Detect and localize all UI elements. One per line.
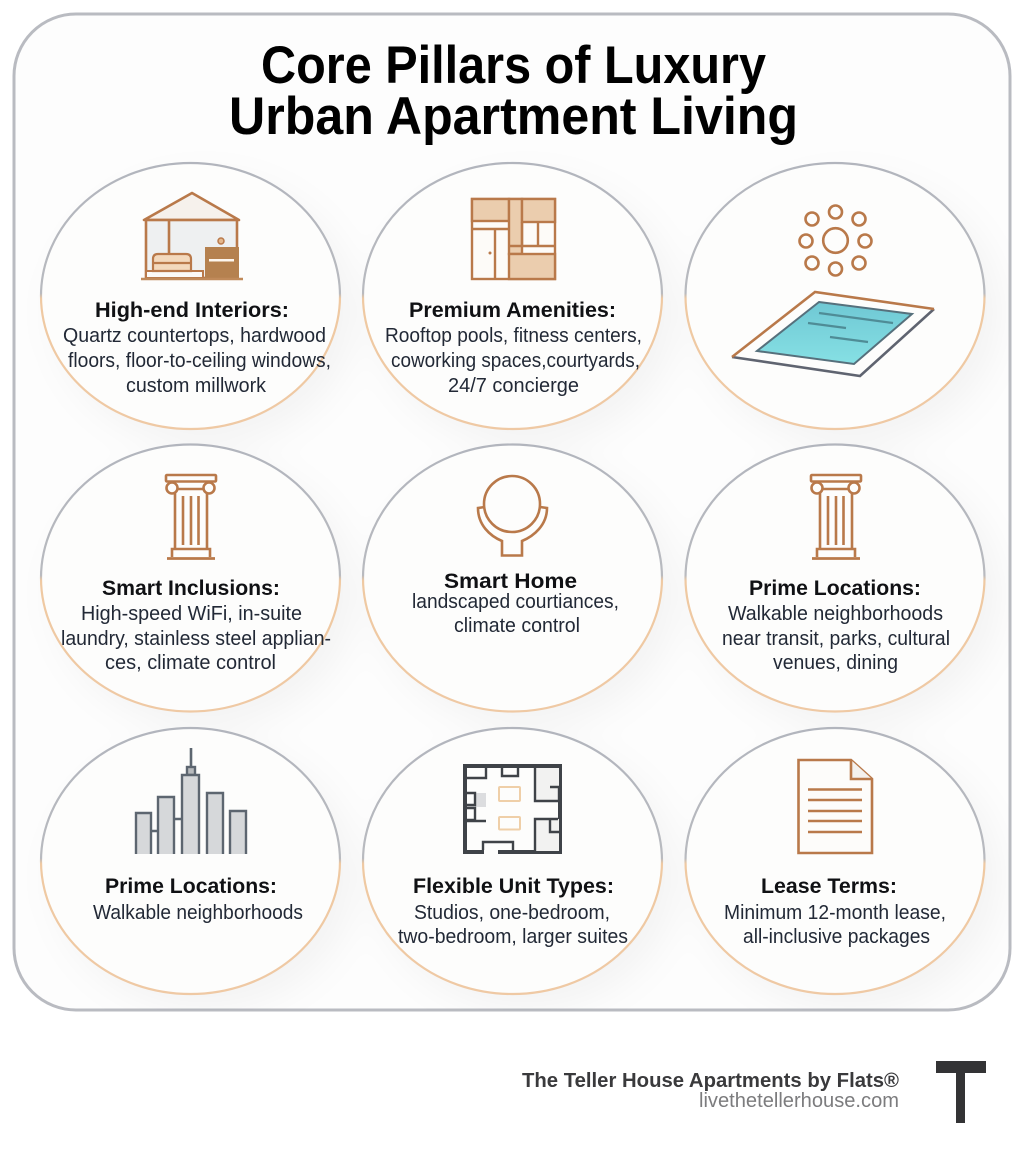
description: Walkable neighborhoods [93,902,303,924]
panel: rooftop pool illustration [686,163,984,429]
description [63,325,331,397]
logo: T mark [936,1061,986,1123]
icon: floor plan blocks [472,199,555,279]
description [724,902,946,948]
description: laundry, stainless steel applian- [61,628,331,650]
heading: Prime Locations: [749,577,921,600]
footer brand text: The Teller House Apartments by Flats® [522,1070,899,1092]
panel: prime locations with skyline [41,728,340,994]
panel: smart inclusions [41,444,340,712]
footer brand text [522,1070,899,1112]
panel: flexible unit types [363,728,662,994]
heading: Smart Inclusions: [102,577,280,600]
description: two-bedroom, larger suites [398,926,628,948]
icon: document [798,760,872,853]
description: all-inclusive packages [743,926,930,948]
icon: house interior [141,193,243,279]
description: Quartz countertops, hardwood [63,325,326,347]
description: climate control [454,615,580,637]
heading: Premium Amenities: [409,299,616,322]
heading: Smart Home [444,570,577,593]
icon: circle in cradle [478,476,547,556]
description: Minimum 12-month lease, [724,902,946,924]
panel: high-end interiors [41,163,340,429]
footer brand text: livethetellerhouse.com [699,1090,899,1112]
description: near transit, parks, cultural [722,628,950,650]
description: floors, floor-to-ceiling windows, [68,350,331,372]
description [722,603,950,674]
panel: lease terms [686,728,984,994]
icon: sun of circles [800,206,872,276]
description: Walkable neighborhoods [728,603,943,625]
description: Rooftop pools, fitness centers, [385,325,642,347]
icon: column [166,475,216,558]
panel: premium amenities [363,163,662,429]
description [61,603,331,674]
description: Studios, one-bedroom, [414,902,610,924]
description: coworking spaces,courtyards, [391,350,640,372]
title: Urban Apartment Living [229,87,798,146]
title [229,36,798,146]
description: High-speed WiFi, in-suite [81,603,302,625]
description [412,591,619,637]
description [385,325,642,397]
description: 24/7 concierge [448,375,579,397]
description: custom millwork [126,375,267,397]
description: venues, dining [773,652,898,674]
panel: prime locations with text [686,444,984,712]
heading: Flexible Unit Types: [413,875,614,898]
description: ces, climate control [105,652,276,674]
heading: High-end Interiors: [95,299,289,322]
description: landscaped courtiances, [412,591,619,613]
panel: smart home [363,444,662,712]
icon: column [811,475,861,558]
heading: Prime Locations: [105,875,277,898]
icon: apartment floor plan [465,766,560,854]
icon: swimming pool [732,292,934,376]
heading: Lease Terms: [761,875,897,898]
icon: city skyline [136,748,246,854]
description [398,902,628,948]
title: Core Pillars of Luxury [261,36,766,95]
